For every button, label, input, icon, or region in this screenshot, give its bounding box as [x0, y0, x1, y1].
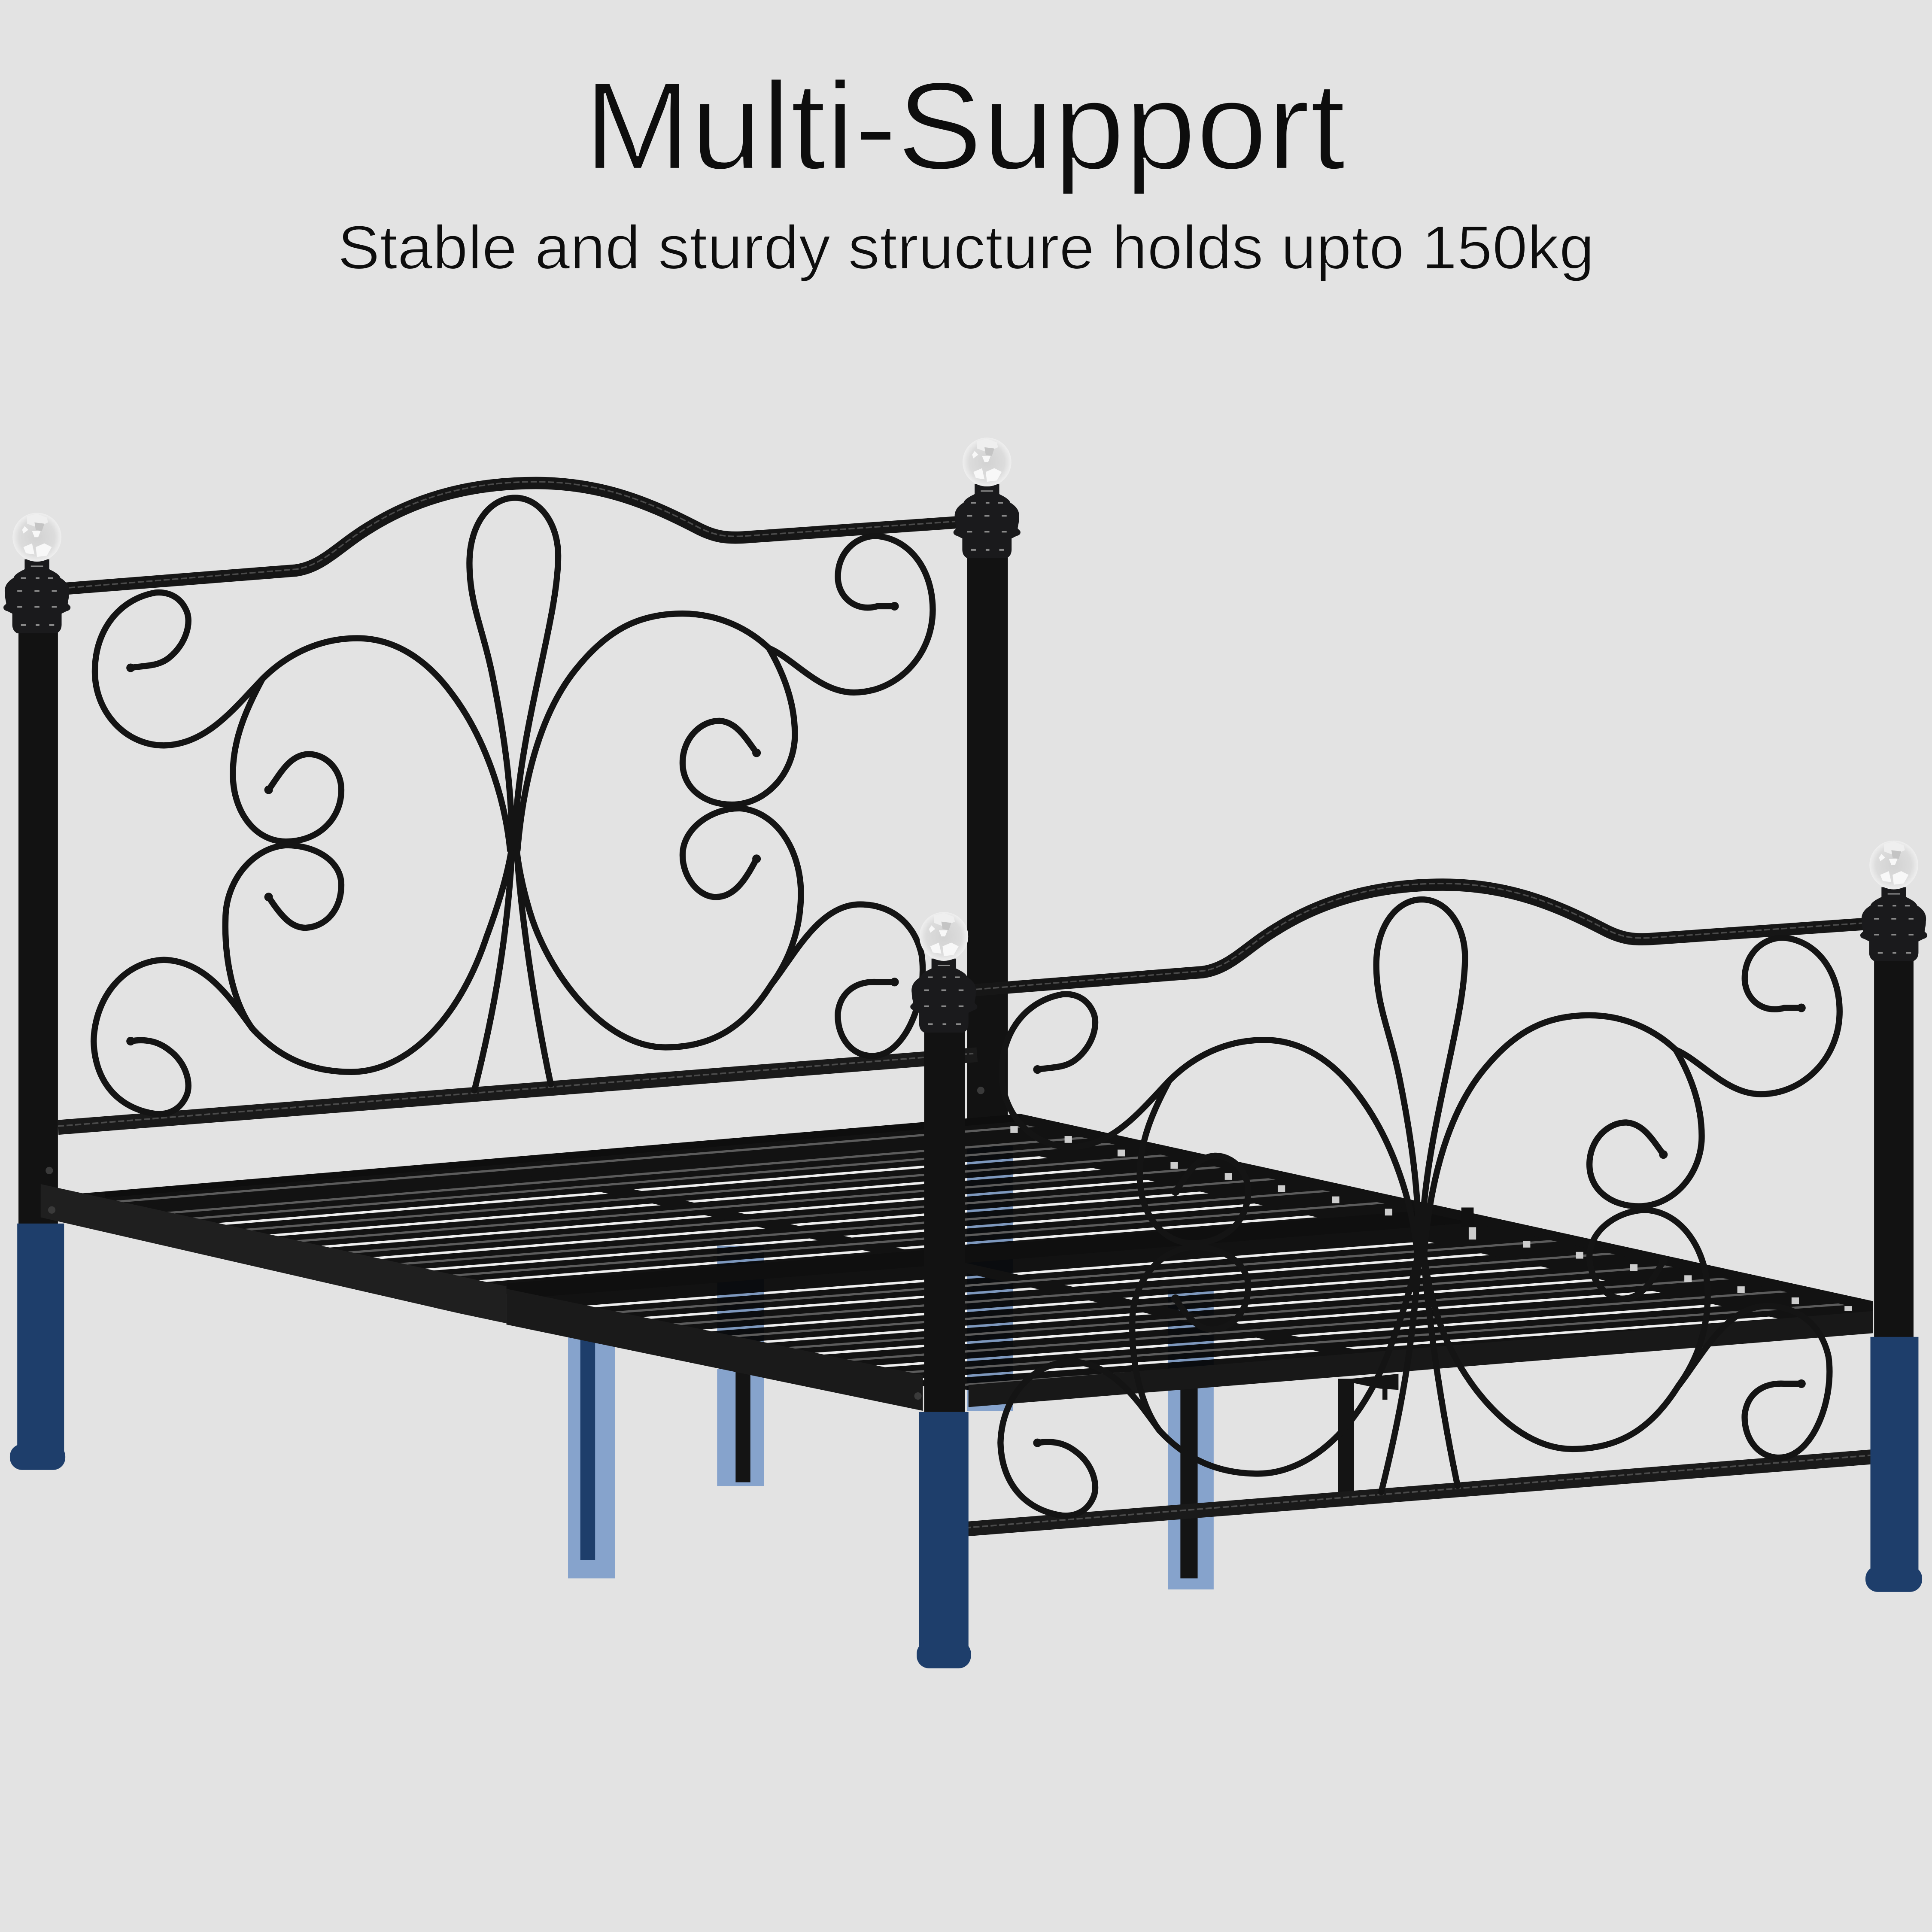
- headboard top rail: [61, 482, 973, 589]
- slat highlights: [116, 1123, 1873, 1386]
- footboard scroll ornament: [1000, 899, 1840, 1516]
- footboard side centre leg: [1168, 1386, 1214, 1589]
- headboard left finial: [3, 513, 70, 633]
- headboard: [3, 437, 1021, 1226]
- back edge: [105, 1118, 1020, 1194]
- headboard right post: [967, 542, 1008, 1133]
- slatted platform: [82, 1114, 1873, 1390]
- subtitle: Stable and sturdy structure holds upto 150kg: [337, 213, 1595, 282]
- footboard lower rail: [965, 1455, 1878, 1529]
- blue legs seen through slats: [717, 1158, 1214, 1377]
- side rail far: [1020, 1114, 1873, 1311]
- slat tabs: [1010, 1126, 1852, 1311]
- front rail: [969, 1311, 1873, 1407]
- bolts: [46, 1087, 984, 1400]
- centre leg bracket: [1340, 1374, 1398, 1400]
- headboard lower rail: [58, 1054, 977, 1127]
- footboard left finial: [910, 912, 977, 1033]
- dark slat ends along far rail: [1039, 1146, 1873, 1318]
- slat gaps: [218, 1146, 1873, 1381]
- side rail right section: [507, 1289, 923, 1411]
- footboard left post: [924, 1023, 965, 1412]
- footboard right post: [1874, 951, 1914, 1338]
- front right leg: [1865, 1337, 1922, 1592]
- centre leg near: [568, 1337, 615, 1578]
- footboard top rail: [969, 884, 1880, 990]
- front left leg: [917, 1412, 971, 1668]
- cross bar: [507, 1215, 1469, 1291]
- rail joint bracket: [1461, 1207, 1473, 1227]
- footboard: [910, 841, 1927, 1529]
- headboard scroll ornament: [94, 498, 933, 1114]
- bed illustration: [3, 437, 1927, 1668]
- side rail left section: [41, 1184, 507, 1323]
- headboard left post: [18, 622, 58, 1226]
- centre beam: [600, 1189, 1354, 1352]
- centre leg far: [717, 1369, 764, 1486]
- back left leg: [10, 1224, 65, 1470]
- title: Multi-Support: [584, 57, 1346, 196]
- back right leg halo: [967, 1386, 1013, 1411]
- footboard right finial: [1860, 841, 1927, 961]
- centre support post: [1338, 1379, 1354, 1493]
- headboard right finial: [954, 437, 1021, 558]
